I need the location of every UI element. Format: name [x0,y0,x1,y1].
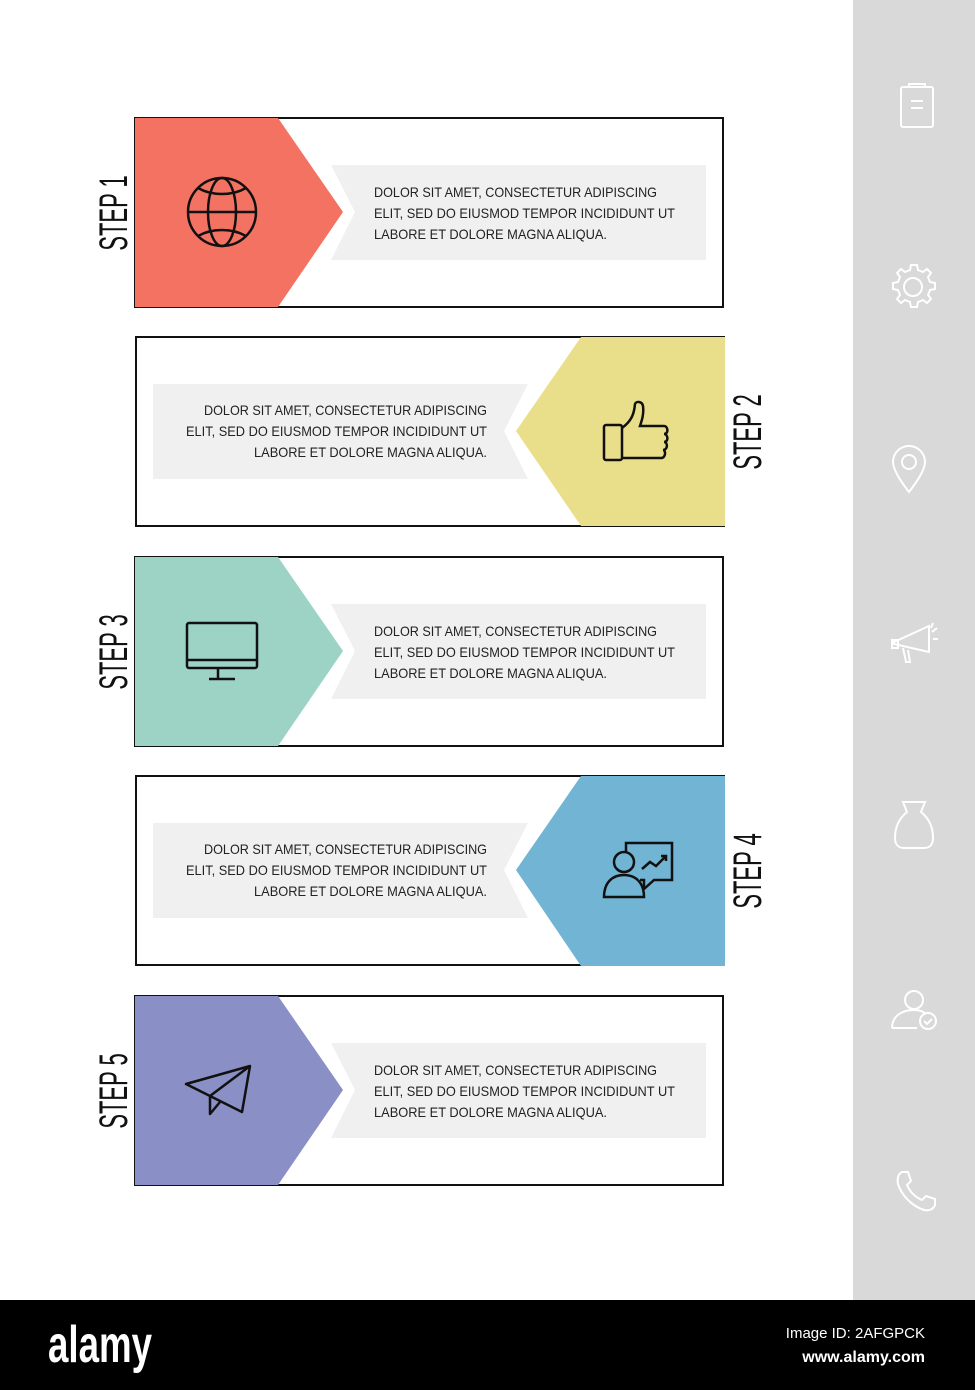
text block 4: LABORE ET DOLORE MAGNA ALIQUA. [254,883,487,899]
icon: globe [188,178,256,246]
text block 3: ELIT, SED DO EIUSMOD TEMPOR INCIDIDUNT UT [374,644,675,660]
icon: money bag [895,802,933,848]
text block 1 [374,184,675,242]
label: step 4: STEP 4 [725,833,770,909]
text block 1: LABORE ET DOLORE MAGNA ALIQUA. [374,226,607,242]
text block 3: LABORE ET DOLORE MAGNA ALIQUA. [374,665,607,681]
icon: thumbs up [604,402,667,460]
icon: location pin [893,446,925,492]
text block 4: ELIT, SED DO EIUSMOD TEMPOR INCIDIDUNT UT [186,862,487,878]
text block 5: LABORE ET DOLORE MAGNA ALIQUA. [374,1104,607,1120]
text block 1: ELIT, SED DO EIUSMOD TEMPOR INCIDIDUNT UT [374,205,675,221]
image id: Image ID: 2AFGPCK [786,1325,925,1342]
icon: phone [898,1172,935,1210]
step 5 [91,996,723,1185]
text block 2 [186,402,487,460]
icon: gear [893,265,935,307]
step 3 [91,557,723,746]
text block 3: DOLOR SIT AMET, CONSECTETUR ADIPISCING [374,623,657,639]
label: step 3: STEP 3 [91,614,136,690]
text block 1: DOLOR SIT AMET, CONSECTETUR ADIPISCING [374,184,657,200]
icon: monitor [187,623,257,679]
icon: paper plane [186,1066,250,1114]
icon: megaphone [892,623,938,662]
text block 5: ELIT, SED DO EIUSMOD TEMPOR INCIDIDUNT UT [374,1083,675,1099]
footer bar: www.alamy.com [801,1349,925,1366]
text block 2: ELIT, SED DO EIUSMOD TEMPOR INCIDIDUNT UT [186,423,487,439]
icon: clipboard [901,84,933,127]
step 1 [91,118,723,307]
text block 4: DOLOR SIT AMET, CONSECTETUR ADIPISCING [204,841,487,857]
text block 3 [374,623,675,681]
text block 5 [374,1062,675,1120]
footer bar [0,1300,975,1390]
label: step 2: STEP 2 [725,394,770,470]
logo: alamy [48,1316,152,1374]
text block 2: DOLOR SIT AMET, CONSECTETUR ADIPISCING [204,402,487,418]
sidebar [853,0,975,1300]
step 2 [136,337,770,526]
text block 5: DOLOR SIT AMET, CONSECTETUR ADIPISCING [374,1062,657,1078]
step 4 [136,776,770,966]
text block 2: LABORE ET DOLORE MAGNA ALIQUA. [254,444,487,460]
icon: user check [892,991,936,1029]
label: step 5: STEP 5 [91,1053,136,1129]
icon: presenter chart [604,843,672,897]
label: step 1: STEP 1 [91,175,136,251]
text block 4 [186,841,487,899]
